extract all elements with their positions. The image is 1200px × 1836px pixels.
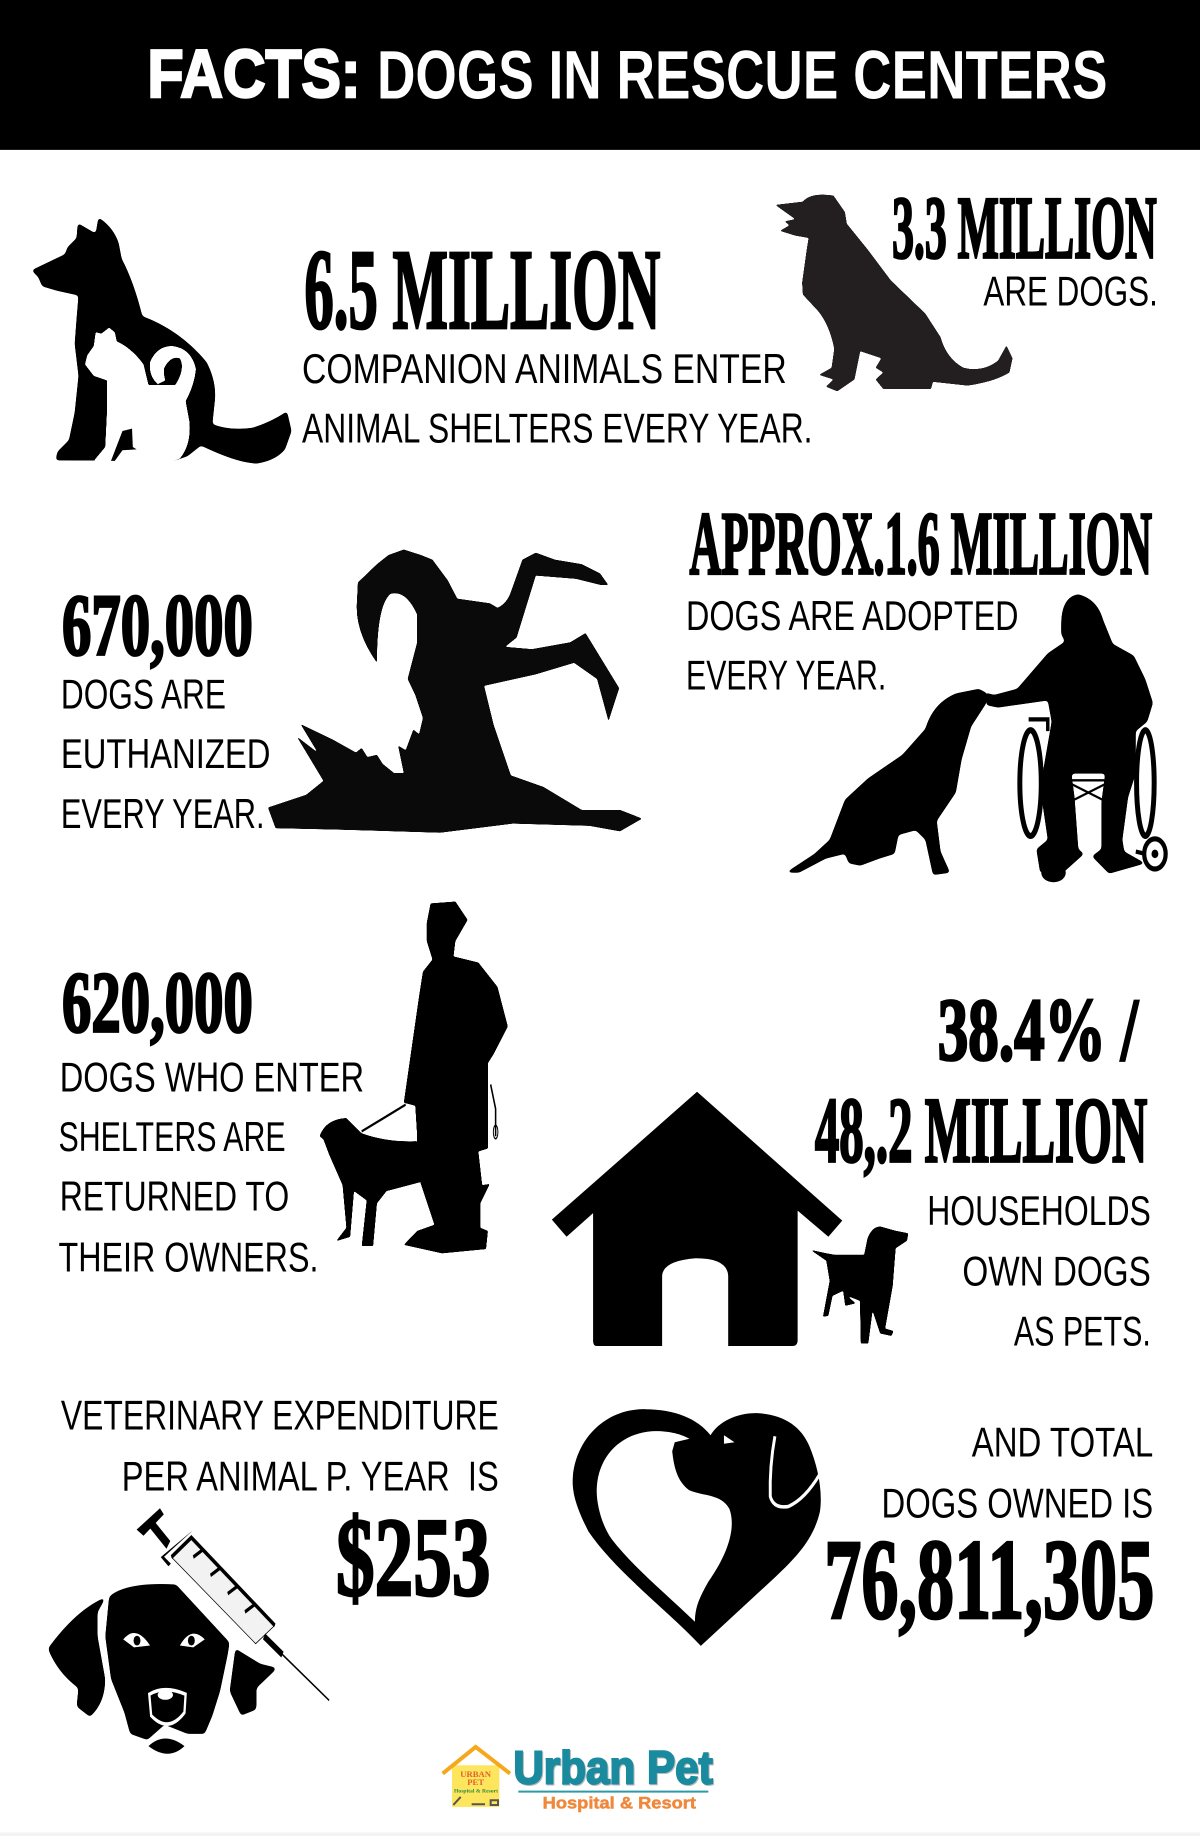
panel: adopted — [686, 494, 1166, 882]
text: dogs are euthanized every year: DOGS ARE — [61, 670, 226, 717]
text: companion animals enter shelters: COMPANION ANIMALS ENTER — [302, 345, 787, 392]
icon: sitting retriever — [775, 195, 1013, 391]
text: dogs are euthanized every year: EVERY YEAR. — [61, 790, 265, 837]
stat: 670,000: 670,000 — [62, 577, 253, 674]
text: households own dogs as pets: OWN DOGS — [962, 1248, 1151, 1295]
text: dogs returned to owners: DOGS WHO ENTER — [60, 1053, 364, 1100]
logo: Urban Pet Hospital & Resort — [443, 1742, 714, 1813]
panel: households own dogs — [552, 982, 1151, 1354]
logo: Urban Pet Hospital & Resort: Hospital & Resort — [543, 1794, 696, 1813]
icon: dog house and small dog — [552, 1092, 908, 1346]
text: dogs are euthanized every year: EUTHANIZED — [61, 730, 270, 777]
text: dogs returned to owners — [59, 1053, 364, 1281]
panel: veterinary expenditure — [48, 1392, 499, 1754]
text: and total dogs owned is — [882, 1419, 1153, 1527]
text: dogs are euthanized every year — [61, 670, 270, 837]
logo: Urban Pet Hospital & Resort: PET — [467, 1777, 484, 1787]
icon: dog and cat silhouette — [31, 217, 292, 464]
stat: 6.5 million: 6.5 MILLION — [304, 226, 660, 353]
title banner: FACTS: — [148, 37, 361, 112]
text: households own dogs as pets: AS PETS. — [1014, 1307, 1151, 1354]
text: households own dogs as pets — [927, 1187, 1151, 1354]
logo: Urban Pet Hospital & Resort: Urban Pet — [513, 1742, 713, 1794]
panel: returned to owners — [59, 902, 508, 1281]
text: dogs are adopted: EVERY YEAR. — [686, 652, 886, 699]
logo: Urban Pet Hospital & Resort: Hospital & Resort — [454, 1789, 498, 1794]
text: and total dogs owned is: AND TOTAL — [972, 1419, 1153, 1466]
icon: person walking dog on leash — [320, 902, 508, 1253]
title banner — [0, 0, 1200, 150]
text: dogs returned to owners: THEIR OWNERS. — [59, 1234, 318, 1281]
logo: Urban Pet Hospital & Resort: URBAN — [460, 1769, 492, 1779]
text: veterinary expenditure per animal: PER ANIMAL P. YEAR IS — [122, 1453, 499, 1500]
icon: heart with dog head — [573, 1409, 821, 1646]
text: veterinary expenditure per animal: VETERINARY EXPENDITURE — [61, 1392, 499, 1439]
stat: $253: $253 — [336, 1496, 491, 1620]
text: companion animals enter shelters: ANIMAL SHELTERS EVERY YEAR. — [302, 405, 812, 452]
icon: dog lying upside down — [268, 549, 642, 833]
panel: 3.3 million dogs — [775, 180, 1158, 391]
text: dogs are adopted: DOGS ARE ADOPTED — [686, 592, 1019, 639]
icon: dog head with syringe — [48, 1508, 329, 1754]
panel: companion animals — [31, 217, 812, 464]
icon: person in wheelchair petting dog — [786, 594, 1166, 882]
panel: euthanized — [61, 549, 642, 837]
text: dogs are adopted — [686, 592, 1019, 699]
text: veterinary expenditure per animal — [61, 1392, 499, 1500]
text: companion animals enter shelters — [302, 345, 812, 452]
text: dogs returned to owners: RETURNED TO — [60, 1173, 289, 1220]
panel: total dogs owned — [573, 1409, 1154, 1646]
text: dogs returned to owners: SHELTERS ARE — [59, 1113, 286, 1160]
stat: 620,000: 620,000 — [62, 955, 253, 1051]
logo: Urban Pet Hospital & Resort: Urban Pet — [514, 1743, 714, 1795]
